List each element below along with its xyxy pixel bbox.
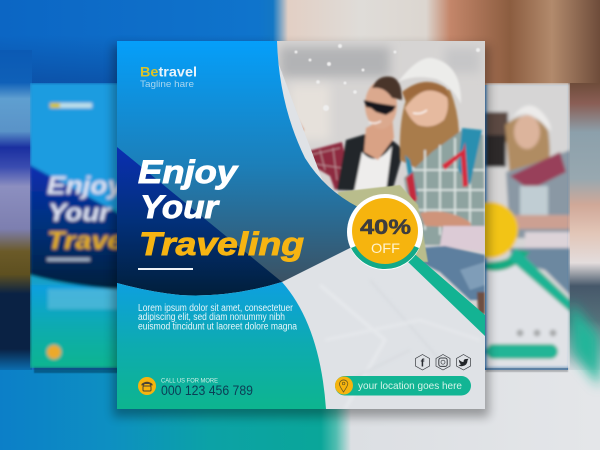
phone contact: CALL US FOR MORE — [161, 378, 219, 384]
map — [338, 185, 428, 262]
paper background — [117, 41, 485, 409]
man — [300, 74, 404, 192]
icon: facebook: f — [421, 358, 425, 370]
icon: location pin — [335, 376, 353, 394]
brand logo: Tagline hare — [140, 79, 194, 90]
headline: Traveling — [139, 226, 304, 262]
headline underline — [138, 268, 193, 270]
brand logo: Betravel — [140, 64, 197, 80]
body copy: adipiscing elit, sed diam nonummy nibh — [138, 312, 285, 323]
brand logo — [140, 66, 196, 89]
discount badge — [347, 194, 423, 270]
discount badge: OFF — [371, 240, 400, 256]
icon: instagram — [436, 354, 450, 370]
back card: right — [485, 83, 570, 368]
main card shadow — [113, 45, 489, 417]
icon: twitter — [456, 354, 470, 370]
social icons — [416, 354, 470, 370]
location pill: your location goes here — [358, 380, 462, 392]
back card: left: Traveling — [47, 227, 175, 255]
icon: phone — [138, 377, 156, 395]
woman — [398, 58, 485, 315]
back card: left — [30, 83, 117, 368]
phone contact: 000 123 456 789 — [161, 383, 253, 398]
body copy — [138, 303, 297, 332]
main card — [117, 41, 485, 409]
discount badge: 40% — [360, 216, 411, 239]
body copy: euismod tincidunt ut laoreet dolore magna — [138, 322, 297, 332]
teal lower shape — [117, 282, 326, 409]
headline: Your — [140, 189, 220, 225]
photo backdrop — [270, 41, 485, 321]
body copy: Lorem ipsum dolor sit amet, consectetuer — [138, 303, 294, 314]
back card: left: Enjoy — [47, 172, 124, 200]
travel photo — [270, 41, 485, 321]
headline: Enjoy — [138, 154, 240, 190]
headline — [138, 154, 304, 262]
blue upper shape — [117, 41, 357, 284]
phone contact — [138, 377, 252, 395]
dark diagonal shape — [117, 147, 282, 295]
blurred back cards — [30, 83, 570, 368]
teal diagonal band — [408, 250, 485, 336]
back card: left: Your — [48, 199, 111, 227]
location pill — [335, 376, 471, 396]
